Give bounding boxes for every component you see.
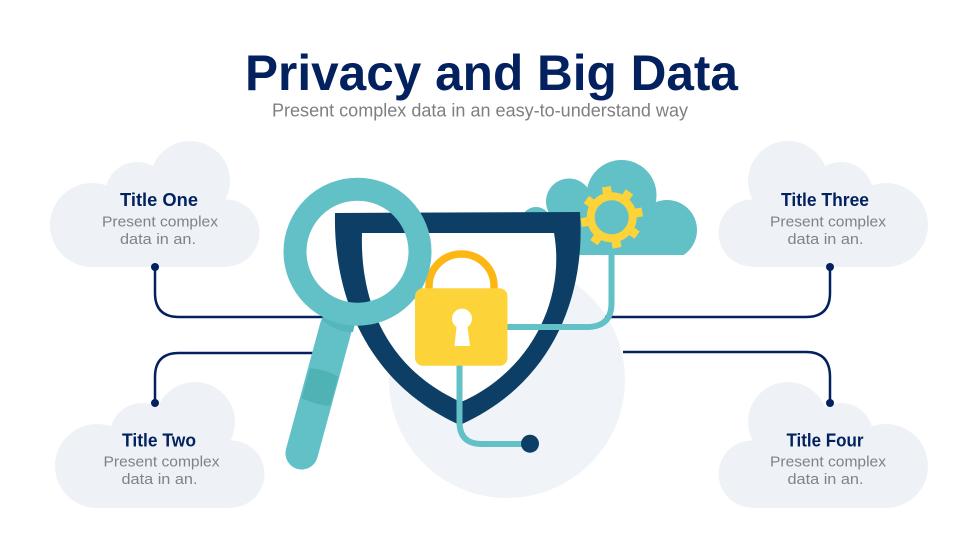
wire: cloud to lock	[500, 250, 612, 327]
connector: title two	[151, 353, 330, 407]
title: Privacy and Big Data	[245, 45, 739, 101]
gear icon	[580, 186, 643, 249]
text: title two: data in an.	[122, 471, 198, 488]
connector: title three	[605, 263, 834, 317]
text: title two: Present complex	[104, 454, 220, 470]
text: title two: Title Two	[122, 430, 196, 450]
text: title one: Present complex	[102, 214, 219, 230]
text: title two	[104, 430, 220, 488]
subtitle: Present complex data in an easy-to-understand way	[272, 100, 688, 120]
text: title three	[770, 190, 887, 248]
background circle	[389, 262, 625, 498]
text: title one	[102, 190, 219, 248]
text: title one: data in an.	[120, 231, 196, 248]
teal cloud	[521, 160, 697, 260]
lock shackle	[429, 254, 494, 292]
text: title three: Title Three	[781, 190, 869, 210]
text: title one: Title One	[120, 190, 198, 210]
cloud: title three	[718, 141, 928, 267]
text: title four: Title Four	[786, 430, 864, 450]
magnifying glass	[295, 189, 420, 453]
text: title three: Present complex	[770, 214, 887, 230]
cloud: title one	[50, 141, 260, 267]
wire: lock to node	[460, 360, 539, 453]
keyhole	[452, 309, 472, 346]
text: title four	[770, 430, 887, 488]
shield	[335, 212, 581, 425]
lock body	[415, 288, 508, 366]
cloud: title two	[55, 382, 264, 508]
text: title four: Present complex	[770, 454, 887, 470]
cloud: title four	[718, 382, 928, 508]
text: title three: data in an.	[788, 231, 864, 248]
connector: title four	[623, 352, 834, 407]
connector: title one	[151, 263, 330, 317]
text: title four: data in an.	[788, 471, 864, 488]
